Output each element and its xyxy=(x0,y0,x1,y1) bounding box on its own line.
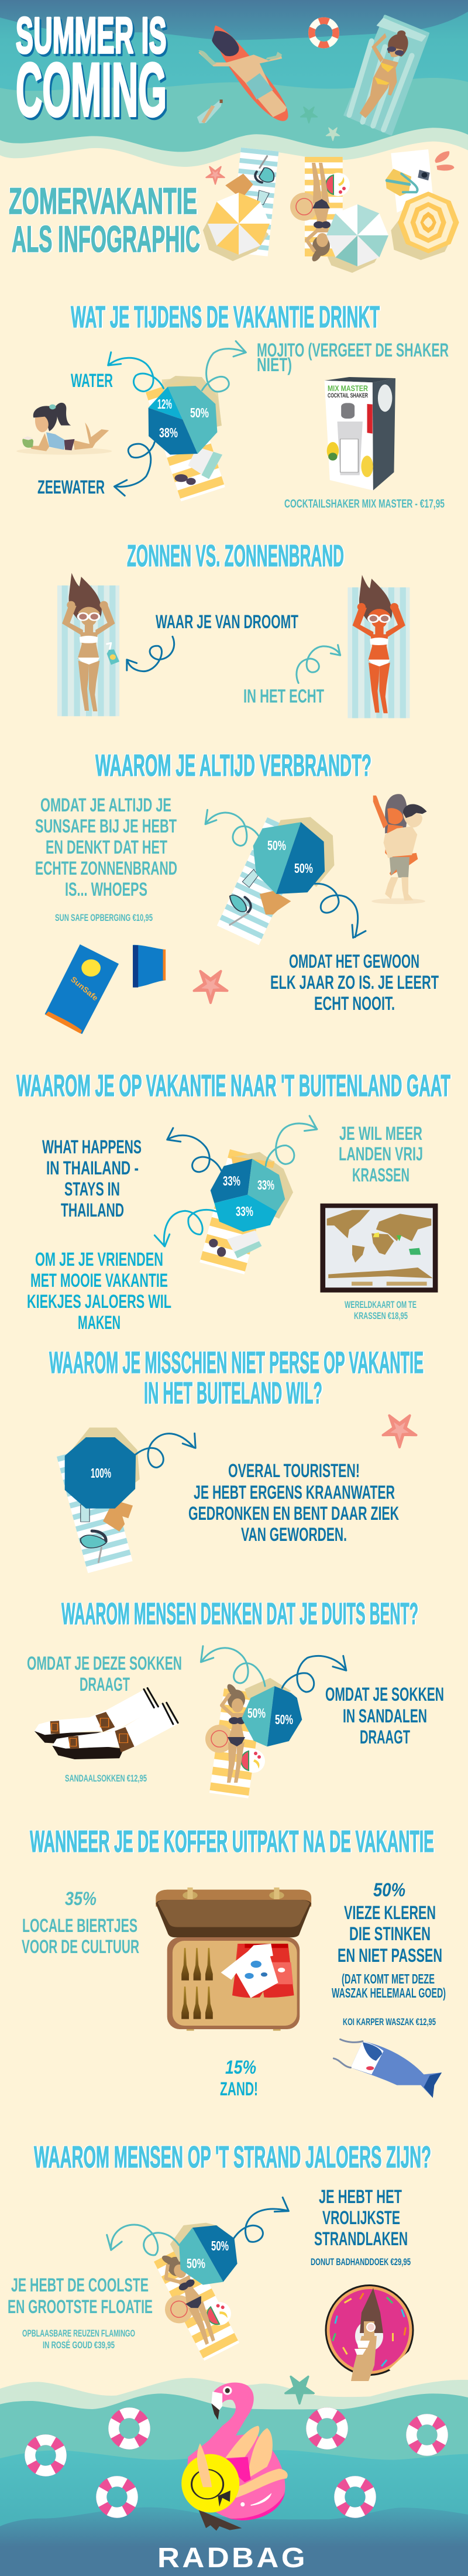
text block: what happens: STAYS IN xyxy=(64,1179,120,1200)
chart: umbrella pie 50 / 50 xyxy=(242,1678,302,1746)
arrows xyxy=(154,1116,317,1246)
subtitle: zomervakantie als infographic: ZOMERVAKANTIE xyxy=(9,181,197,222)
illustration: girl drinking coconut xyxy=(16,403,112,455)
text block: 35 percent biertjes: 35% xyxy=(65,1888,97,1909)
text block: 50 percent kleren xyxy=(332,1879,446,2000)
illustration: sunburnt girl on towel xyxy=(347,575,410,718)
towel with sunbather xyxy=(205,1683,265,1799)
text block: deze sokken: OMDAT JE DEZE SOKKEN xyxy=(27,1653,182,1674)
beach towel with snorkel and shorts xyxy=(225,148,278,256)
chart: umbrella pie 50 / 50: 50% xyxy=(294,861,313,876)
chart: umbrella pie 50 / 50: 50% xyxy=(275,1712,293,1727)
text block: sokken in sandalen: DRAAGT xyxy=(360,1727,410,1748)
subtitle: zomervakantie als infographic: ALS INFOGRAPHIC xyxy=(12,219,200,260)
product caption: flamingo xyxy=(22,2328,135,2351)
text block: overal touristen: VAN GEWORDEN. xyxy=(241,1524,347,1545)
product: sunsafe bottle and pouch: SunSafe xyxy=(69,975,100,1002)
text block: sokken in sandalen xyxy=(325,1684,444,1748)
heading xyxy=(49,1346,424,1410)
logo: radbag: RADBAG xyxy=(157,2543,308,2574)
towel with snorkel and shorts xyxy=(57,1445,133,1573)
panel: footer sea with flamingo xyxy=(0,2376,468,2576)
text block: what happens: THAILAND xyxy=(61,1200,124,1221)
pink lifebuoys xyxy=(30,2413,443,2513)
beige umbrella shadows xyxy=(203,204,454,273)
text block: 15 percent zand: 15% xyxy=(225,2057,256,2078)
six beer bottles xyxy=(181,1948,213,2019)
product: donut beach towel xyxy=(325,2284,417,2381)
surfer on orange board xyxy=(198,25,288,121)
chart: umbrella pie 50 / 50: 50% xyxy=(187,2256,205,2271)
text block: 35 percent biertjes xyxy=(22,1888,139,1957)
product: cocktail shaker box xyxy=(325,377,395,491)
text block: 15 percent zand: ZAND! xyxy=(220,2078,258,2099)
text block: every year: ECHT NOOIT. xyxy=(314,993,395,1014)
text block: vrolijkste strandlaken: JE HEBT HET xyxy=(319,2186,402,2207)
text block: coolste floatie: EN GROOTSTE FLOATIE xyxy=(8,2296,153,2317)
text block: vakantie kiekjes: MET MOOIE VAKANTIE xyxy=(30,1270,168,1291)
towel with snorkel and shorts xyxy=(217,817,309,945)
product caption: flamingo: IN ROSÉ GOUD €39,95 xyxy=(43,2339,115,2351)
chart: umbrella pie 50 / 50: 50% xyxy=(211,2238,229,2253)
text block: vakantie kiekjes: KIEKJES JALOERS WIL xyxy=(27,1291,171,1312)
subtitle: zomervakantie als infographic xyxy=(9,181,200,260)
text block: every year xyxy=(270,951,439,1014)
text block: what happens xyxy=(42,1136,142,1221)
icon: green starfish xyxy=(301,107,317,123)
text block: sunsafe reason: OMDAT JE ALTIJD JE xyxy=(40,794,171,816)
panel: waarom je altijd verbrandt xyxy=(35,749,439,1034)
text block: deze sokken: DRAAGT xyxy=(80,1674,130,1695)
chart: umbrella pie 33 / 33 / 33: 33% xyxy=(236,1204,253,1219)
text block: sunsafe reason: ECHTE ZONNENBRAND xyxy=(35,858,177,879)
yellow striped towel with sunbather xyxy=(290,157,350,263)
panel: header beach scene xyxy=(0,0,468,293)
label: zeewater: ZEEWATER xyxy=(37,477,105,498)
text block: vakantie kiekjes: MAKEN xyxy=(78,1312,121,1333)
icon: yellow umbrella xyxy=(208,193,270,255)
panel: waarom je misschien niet perse op vakantie xyxy=(49,1346,424,1573)
text block: landen vrij krassen: JE WIL MEER xyxy=(339,1123,422,1144)
product caption: sandaalsokken: SANDAALSOKKEN €12,95 xyxy=(65,1773,147,1784)
arrows xyxy=(201,1646,346,1692)
icon: pink starfish xyxy=(383,1416,417,1447)
panel: waarom mensen op 't strand jaloers zijn xyxy=(8,2140,431,2381)
box lettering xyxy=(328,383,368,399)
chart: umbrella pie 50 / 50: 50% xyxy=(267,838,286,853)
chart: umbrella 100 percent: 100% xyxy=(91,1465,111,1481)
product caption: wereldkaart: WERELDKAART OM TE xyxy=(345,1299,417,1310)
icon: pale starfish xyxy=(326,128,339,141)
label: mojito: NIET) xyxy=(257,354,292,375)
text block: landen vrij krassen: LANDEN VRIJ xyxy=(339,1143,423,1164)
text block: 50 percent kleren: 50% xyxy=(373,1879,405,1900)
icon: bottle with message xyxy=(197,100,223,124)
white towel with bag, camera and flip-flops xyxy=(386,149,455,213)
box lettering: MIX MASTER xyxy=(328,383,368,393)
text block: sunsafe reason xyxy=(35,794,177,900)
title: summer is coming: SUMMER IS xyxy=(16,8,167,64)
text block: landen vrij krassen: KRASSEN xyxy=(352,1164,410,1186)
chart: umbrella pie 50 / 50 xyxy=(170,2223,238,2285)
panel: zonnen vs. zonnenbrand xyxy=(57,539,410,718)
product caption: sun safe: SUN SAFE OPBERGING €10,95 xyxy=(55,912,153,923)
illustration: open suitcase xyxy=(156,1888,311,2031)
text block: overal touristen: OVERAL TOURISTEN! xyxy=(228,1460,360,1481)
arrows xyxy=(127,636,340,683)
text block: vakantie kiekjes xyxy=(27,1249,171,1333)
arrows xyxy=(107,2197,288,2255)
product caption: wereldkaart: KRASSEN €18,95 xyxy=(354,1310,408,1321)
text block: vrolijkste strandlaken xyxy=(314,2186,408,2249)
text block: 35 percent biertjes: LOCALE BIERTJES xyxy=(22,1915,137,1936)
chart: umbrella pie 50 / 38 / 12 with towel: 38% xyxy=(159,425,178,440)
product: sandal socks xyxy=(35,1688,178,1759)
text block: 15 percent zand xyxy=(220,2057,258,2099)
label: water: WATER xyxy=(71,370,113,391)
chart: umbrella 100 percent xyxy=(65,1427,140,1509)
product: sunsafe bottle and pouch xyxy=(45,944,166,1034)
text block: coolste floatie: JE HEBT DE COOLSTE xyxy=(11,2274,149,2296)
chart: umbrella pie 50 / 50 xyxy=(253,817,334,894)
label: waar je van droomt: WAAR JE VAN DROOMT xyxy=(156,611,298,632)
towel with sunbather xyxy=(141,2238,240,2361)
panel: waarom je op vakantie naar 't buitenland gaat xyxy=(16,1069,450,1333)
text block: deze sokken xyxy=(27,1653,182,1695)
chart: umbrella pie 33 / 33 / 33: 33% xyxy=(257,1177,274,1193)
text block: sunsafe reason: IS... WHOEPS xyxy=(65,879,147,900)
icon: concentric yellow umbrella xyxy=(398,191,459,254)
arrows xyxy=(108,341,246,496)
illustration: couple piggyback xyxy=(371,794,427,904)
footer waves xyxy=(0,2378,468,2576)
chart: umbrella pie 50 / 38 / 12 with towel xyxy=(146,376,225,501)
arrow xyxy=(133,1433,195,1468)
towel with book and sunglasses xyxy=(199,1149,274,1275)
text block: vrolijkste strandlaken: STRANDLAKEN xyxy=(314,2228,408,2249)
product: scratch world map xyxy=(320,1204,438,1293)
icon: pink starfish xyxy=(206,167,225,184)
product caption: flamingo: OPBLAASBARE REUZEN FLAMINGO xyxy=(22,2328,135,2339)
text block: landen vrij krassen xyxy=(339,1123,423,1186)
text block: what happens: WHAT HAPPENS xyxy=(42,1136,142,1157)
label: in het echt: IN HET ECHT xyxy=(243,686,324,707)
label: mojito xyxy=(257,340,449,375)
text block: overal touristen xyxy=(188,1460,399,1545)
text block: coolste floatie xyxy=(8,2274,153,2317)
text block: vrolijkste strandlaken: VROLIJKSTE xyxy=(322,2207,400,2228)
icon: orange lifebuoy xyxy=(312,20,336,45)
chart: umbrella pie 50 / 38 / 12 with towel: 12% xyxy=(157,396,172,412)
product caption: wereldkaart xyxy=(345,1299,417,1321)
text block: what happens: IN THAILAND - xyxy=(46,1157,139,1179)
panel: header beach scene: COMING xyxy=(16,47,167,132)
illustration: tanned girl on towel xyxy=(57,573,119,716)
product caption: donut: DONUT BADHANDDOEK €29,95 xyxy=(311,2256,411,2267)
panel: waarom mensen denken dat je duits bent xyxy=(27,1597,444,1799)
chart: umbrella pie 33 / 33 / 33 xyxy=(211,1152,293,1232)
arrows xyxy=(205,810,366,938)
icon: pink starfish xyxy=(194,971,227,1003)
text block: sunsafe reason: EN DENKT DAT HET xyxy=(46,837,167,858)
box lettering: COCKTAIL SHAKER xyxy=(328,392,368,399)
chart: umbrella pie 50 / 50: 50% xyxy=(247,1705,266,1721)
text block: 35 percent biertjes: VOOR DE CULTUUR xyxy=(22,1936,139,1957)
chart: umbrella pie 33 / 33 / 33: 33% xyxy=(223,1173,240,1188)
panel: wanneer je de koffer uitpakt xyxy=(22,1825,446,2099)
title: summer is coming xyxy=(16,8,167,132)
illustration: woman on flamingo float xyxy=(181,2383,288,2531)
text block: 50 percent kleren: DIE STINKEN xyxy=(349,1923,431,1944)
chart: umbrella pie 50 / 38 / 12 with towel: 50% xyxy=(190,405,209,420)
text block: sunsafe reason: SUNSAFE BIJ JE HEBT xyxy=(35,816,177,837)
product: koi laundry bag xyxy=(333,2039,442,2098)
woman on air mattress xyxy=(345,16,428,135)
panel: wat je tijdens de vakantie drinkt xyxy=(16,300,449,511)
sea waves xyxy=(0,0,468,293)
text block: vakantie kiekjes: OM JE JE VRIENDEN xyxy=(35,1249,163,1270)
icon: teal umbrella xyxy=(326,204,388,266)
icon: green starfish xyxy=(285,2376,314,2404)
